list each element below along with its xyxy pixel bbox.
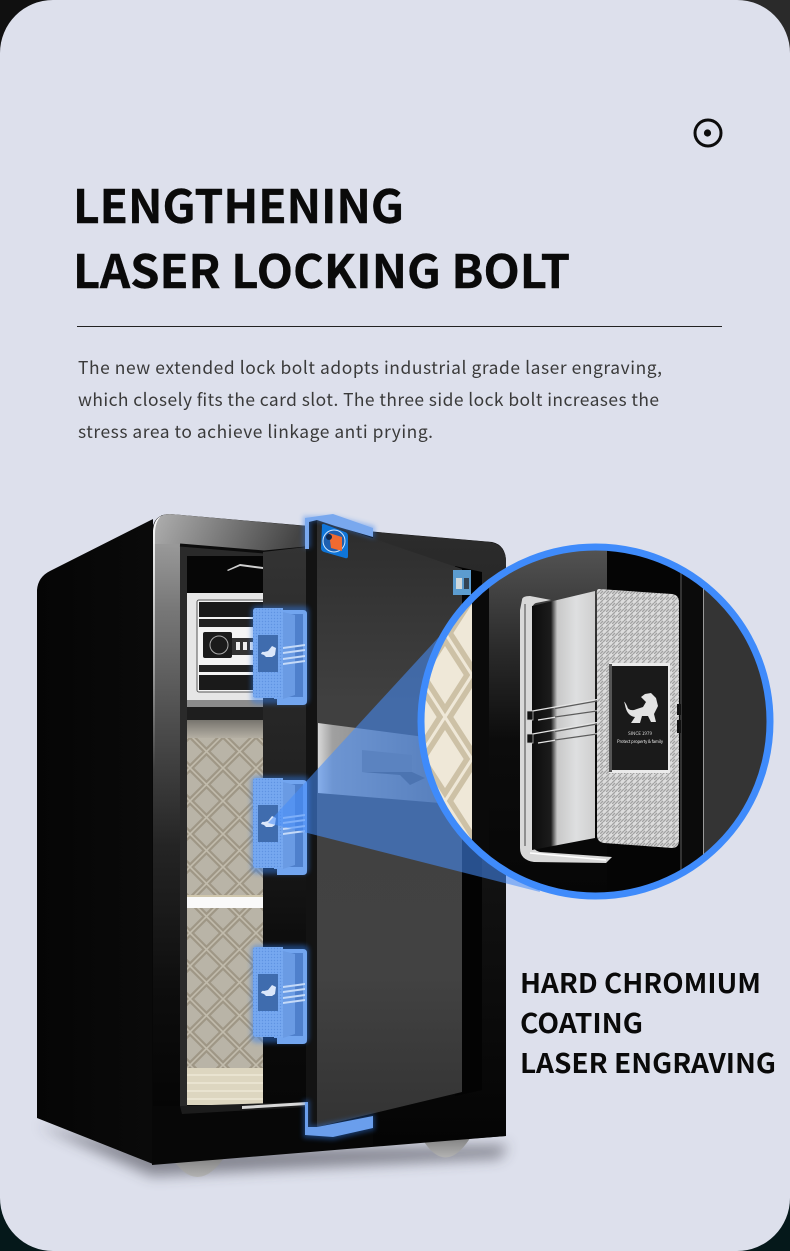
door gap — [455, 566, 482, 1096]
description text: The new extended lock bolt adopts industrial grade laser engraving, — [78, 355, 662, 380]
circle ring — [421, 547, 770, 896]
door handle — [362, 750, 425, 785]
description text — [78, 355, 662, 444]
title divider — [77, 326, 722, 327]
safe interior — [187, 556, 267, 1105]
badge slogan text: Protect property & family — [617, 739, 664, 745]
lion emblem — [624, 693, 658, 723]
bottom door sill — [180, 1102, 307, 1114]
safe cabinet — [37, 514, 506, 1165]
magnified bolt bars — [527, 699, 600, 743]
frame right column — [373, 532, 506, 1146]
magnified detail circle — [418, 544, 774, 900]
door hinge edge — [306, 519, 318, 1128]
bottom lock bolt blue cap — [303, 1100, 375, 1140]
title: LENGTHENING — [73, 171, 404, 237]
magnified bolt bracket — [520, 596, 612, 863]
callout: coating and engraving — [520, 962, 776, 1081]
magnified frame — [472, 588, 489, 856]
magnified lining — [424, 604, 472, 840]
title — [73, 171, 570, 302]
cabinet front frame — [152, 514, 506, 1165]
magnified bolt body — [532, 591, 595, 850]
lock bolt: middle — [251, 776, 309, 875]
top lock bolt blue cap — [303, 514, 375, 549]
cabinet side — [37, 519, 153, 1164]
sticker: QR label — [453, 570, 471, 595]
safe feet — [170, 1135, 472, 1177]
title: LASER LOCKING BOLT — [73, 236, 570, 302]
blue zoom beam — [268, 614, 540, 892]
icon: target dot — [695, 120, 721, 146]
callout: coating and engraving: HARD CHROMIUM — [520, 962, 761, 1001]
callout: coating and engraving: COATING — [520, 1002, 643, 1041]
door face — [317, 519, 462, 1127]
floor shadow — [38, 1125, 508, 1176]
description text: which closely fits the card slot. The three side lock bolt increases the — [78, 387, 659, 412]
lock bolt: lower — [251, 945, 309, 1044]
magnified lion badge — [609, 663, 670, 773]
plate side notches — [677, 704, 681, 733]
top slit — [180, 545, 306, 552]
sticker: hologram — [321, 524, 348, 558]
callout: coating and engraving: LASER ENGRAVING — [520, 1042, 776, 1081]
inner frame strip — [180, 545, 264, 1106]
frame left column — [153, 530, 187, 1106]
door inner edge — [263, 547, 306, 1102]
magnified knurled plate — [597, 589, 679, 848]
frame top highlight — [153, 514, 306, 552]
badge since text: SINCE 1979 — [628, 731, 652, 737]
lock bolt: upper — [251, 606, 309, 705]
description text: stress area to achieve linkage anti prying. — [78, 419, 433, 444]
frame edge highlight — [153, 516, 161, 770]
door handle plate — [318, 723, 440, 803]
